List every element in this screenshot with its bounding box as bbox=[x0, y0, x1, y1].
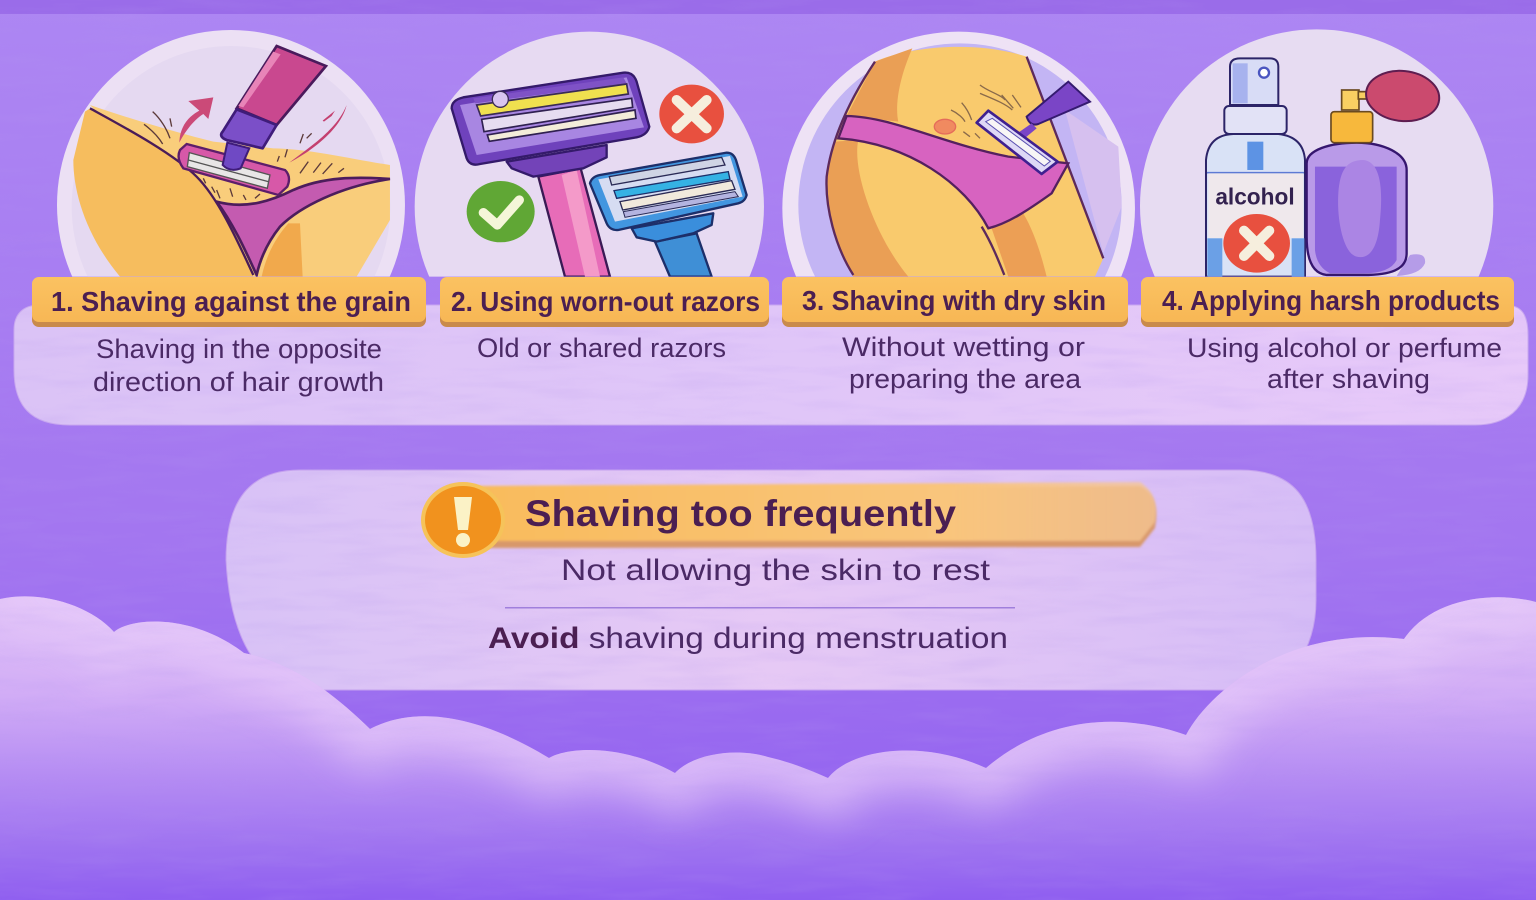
label: alcohol: alcohol bbox=[1215, 183, 1295, 209]
step 1 description bbox=[93, 334, 384, 397]
upper text panel bbox=[14, 305, 1528, 425]
step 4 description: after shaving bbox=[1267, 364, 1430, 394]
step 3 description: preparing the area bbox=[849, 364, 1082, 394]
step 2 description: Old or shared razors bbox=[477, 333, 726, 363]
perfume bottle bbox=[1307, 67, 1442, 276]
callout heading: Shaving too frequently bbox=[525, 493, 956, 534]
callout banner bbox=[421, 482, 1156, 558]
step 4 description: Using alcohol or perfume bbox=[1187, 333, 1502, 363]
callout text: Not allowing the skin to rest bbox=[561, 554, 991, 587]
step 2 illustration: worn-out razors bbox=[414, 32, 764, 277]
step 4 illustration: harsh products bbox=[1140, 29, 1494, 277]
step 2 title bar: 2. Using worn-out razors bbox=[451, 286, 760, 317]
step 3 illustration: dry skin bbox=[782, 32, 1135, 277]
step 4 title bar: 4. Applying harsh products bbox=[1162, 285, 1500, 316]
red cross bbox=[659, 85, 724, 143]
razor bbox=[237, 46, 326, 125]
clouds bbox=[0, 596, 1536, 900]
pink razor bbox=[538, 168, 610, 277]
step 3 description: Without wetting or bbox=[842, 332, 1085, 362]
step 3 title bar bbox=[782, 277, 1128, 327]
step 1 illustration: shaving against the grain bbox=[57, 30, 405, 277]
lower callout panel bbox=[226, 470, 1316, 690]
red cross bbox=[1223, 214, 1290, 273]
irritation bump bbox=[934, 119, 956, 134]
spray bottle bbox=[1206, 58, 1305, 277]
step 3 title bar: 3. Shaving with dry skin bbox=[802, 285, 1106, 316]
hair marks bbox=[144, 112, 344, 200]
underwear bbox=[217, 178, 390, 275]
blue razor bbox=[655, 233, 712, 277]
underwear bbox=[838, 116, 1068, 228]
step 2 title bar bbox=[440, 277, 769, 327]
icon: warning bbox=[421, 482, 505, 558]
arrow bbox=[179, 97, 213, 143]
green check bbox=[467, 181, 535, 242]
step 1 title bar: 1. Shaving against the grain bbox=[51, 286, 411, 317]
step 4 description bbox=[1187, 333, 1502, 394]
avoid note: Avoid shaving during menstruation bbox=[488, 622, 1008, 655]
razor bbox=[1027, 82, 1090, 125]
step 4 title bar bbox=[1141, 277, 1514, 327]
step 1 title bar bbox=[32, 277, 426, 327]
step 1 description: direction of hair growth bbox=[93, 367, 384, 397]
step 3 description bbox=[842, 332, 1085, 394]
step 1 description: Shaving in the opposite bbox=[96, 334, 382, 364]
top strip bbox=[0, 0, 1536, 14]
